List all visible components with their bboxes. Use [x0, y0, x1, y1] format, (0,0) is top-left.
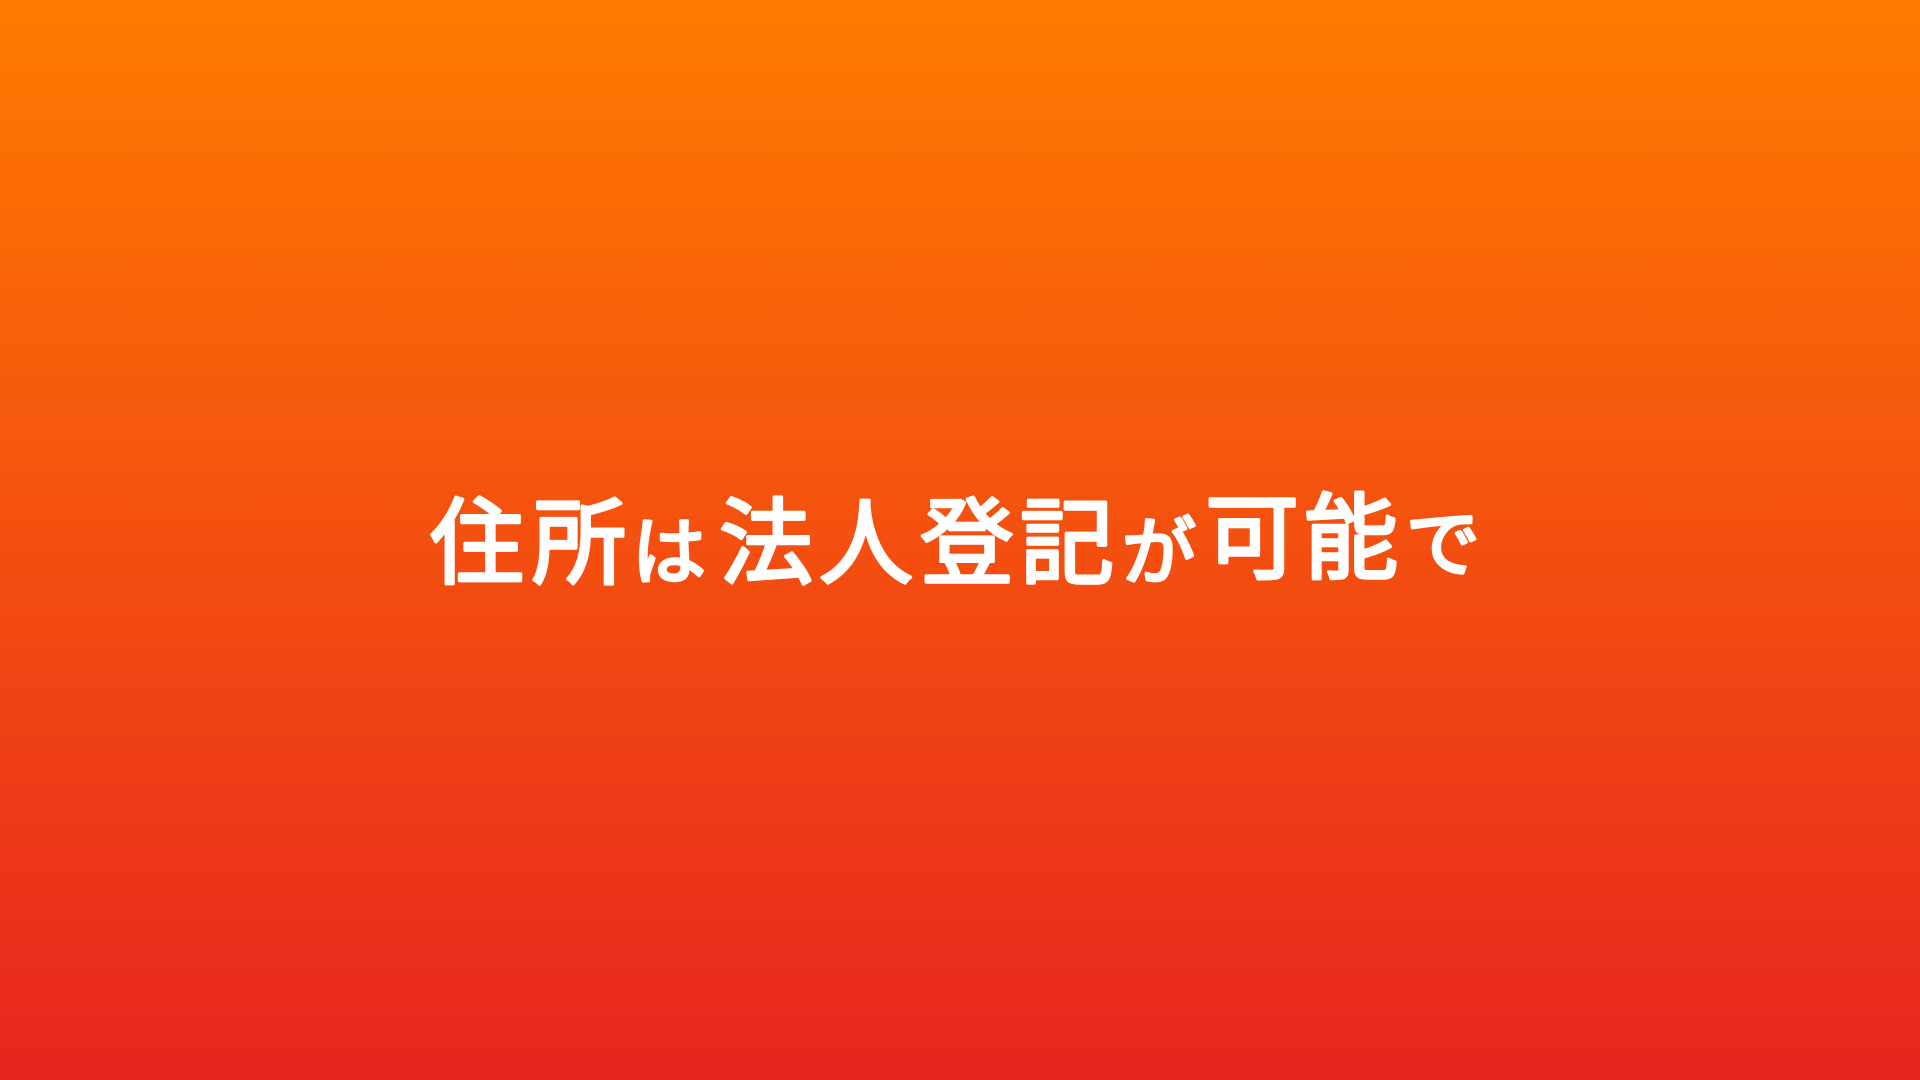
- caption text: が: [1122, 511, 1196, 594]
- caption text: 可: [1205, 486, 1299, 591]
- caption text: 登: [920, 491, 1014, 596]
- caption text: 能: [1304, 486, 1398, 591]
- caption text: 法: [719, 491, 813, 596]
- caption text: は: [632, 511, 706, 594]
- caption text: で: [1406, 503, 1480, 586]
- caption text: 住: [430, 491, 524, 596]
- caption text: 所: [532, 491, 626, 596]
- caption text: 人: [819, 491, 913, 596]
- caption text: 記: [1020, 491, 1114, 596]
